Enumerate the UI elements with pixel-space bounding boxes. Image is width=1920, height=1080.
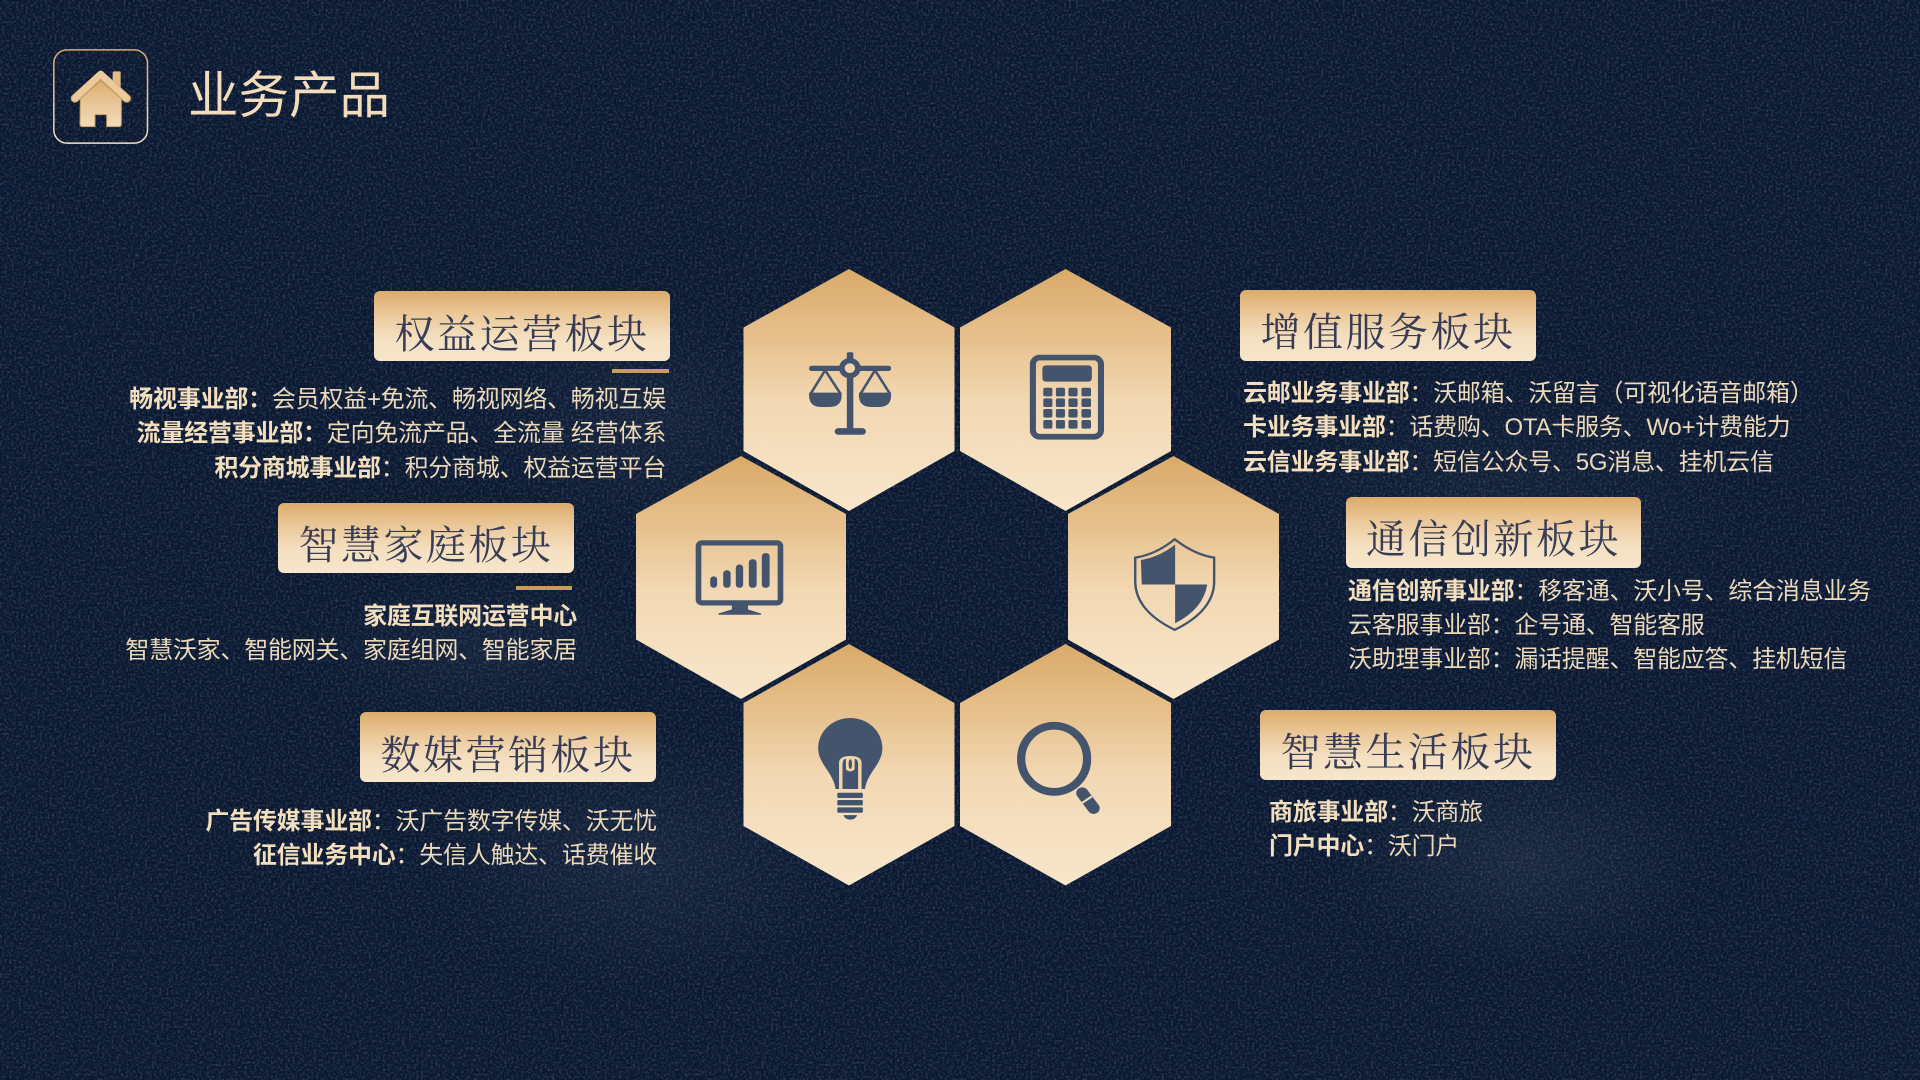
section tag: 数媒营销板块 [360, 712, 656, 782]
hexagon: bottom right with magnifier icon [960, 644, 1171, 886]
text block: 智慧生活 details: 商旅事业部：沃商旅 [1269, 798, 1483, 826]
section tag: 通信创新板块 [1346, 497, 1641, 568]
text block: 增值服务 details: 云邮业务事业部：沃邮箱、沃留言（可视化语音邮箱） [1243, 380, 1813, 407]
accent rule [516, 586, 572, 590]
section tag: 数媒营销板块: 数媒营销板块 [380, 733, 636, 778]
text block: 通信创新 details: 云客服事业部：企号通、智能客服 [1348, 612, 1705, 639]
hexagon: middle left with monitor icon [636, 456, 846, 699]
section tag: 增值服务板块 [1240, 290, 1536, 361]
text block: 权益运营 details: 畅视事业部：会员权益+免流、畅视网络、畅视互娱 [129, 386, 666, 413]
text block: 智慧生活 details [1269, 798, 1483, 860]
text block: 权益运营 details: 流量经营事业部：定向免流产品、全流量 经营体系 [137, 420, 666, 447]
hexagon: top right with calculator icon [960, 269, 1171, 511]
section tag: 智慧家庭板块 [278, 503, 574, 573]
icon: home badge [53, 49, 148, 144]
text block: 增值服务 details: 云信业务事业部：短信公众号、5G消息、挂机云信 [1243, 449, 1774, 476]
text block: 智慧家庭 details [125, 603, 577, 664]
text block: 智慧生活 details: 门户中心：沃门户 [1269, 833, 1459, 860]
section tag: 权益运营板块 [374, 291, 670, 361]
text block: 通信创新 details: 通信创新事业部：移客通、沃小号、综合消息业务 [1348, 578, 1871, 604]
section tag: 通信创新板块: 通信创新板块 [1366, 517, 1621, 562]
icon: magnifying glass [1021, 726, 1094, 808]
text block: 通信创新 details [1348, 578, 1871, 673]
section tag: 智慧生活板块 [1260, 710, 1556, 780]
text block: 数媒营销 details: 广告传媒事业部：沃广告数字传媒、沃无忧 [205, 808, 657, 835]
hexagon: middle right with shield icon [1068, 456, 1279, 699]
accent rule [612, 369, 669, 373]
section tag: 增值服务板块: 增值服务板块 [1260, 310, 1516, 355]
text block: 智慧家庭 details: 家庭互联网运营中心 [363, 603, 577, 630]
text block: 智慧家庭 details: 智慧沃家、智能网关、家庭组网、智能家居 [125, 637, 577, 664]
section tag: 权益运营板块: 权益运营板块 [394, 312, 650, 357]
text block: 权益运营 details [129, 386, 666, 482]
section tag: 智慧家庭板块: 智慧家庭板块 [298, 523, 554, 568]
hexagon: top left with scales icon [744, 269, 954, 511]
text block: 通信创新 details: 沃助理事业部：漏话提醒、智能应答、挂机短信 [1348, 646, 1847, 673]
text block: 增值服务 details [1243, 380, 1813, 476]
title: 业务产品 [188, 67, 390, 124]
icon: balance scales [809, 352, 891, 435]
icon: shield [1135, 539, 1214, 630]
text block: 数媒营销 details: 征信业务中心：失信人触达、话费催收 [253, 842, 657, 869]
icon: calculator [1033, 358, 1101, 437]
icon: monitor with bars [698, 543, 780, 615]
text block: 数媒营销 details [205, 808, 657, 869]
hexagon: bottom left with light bulb icon [744, 644, 954, 886]
icon: light bulb [818, 718, 882, 820]
text block: 权益运营 details: 积分商城事业部：积分商城、权益运营平台 [214, 455, 666, 482]
section tag: 智慧生活板块: 智慧生活板块 [1280, 730, 1536, 775]
text block: 增值服务 details: 卡业务事业部：话费购、OTA卡服务、Wo+计费能力 [1243, 414, 1790, 441]
